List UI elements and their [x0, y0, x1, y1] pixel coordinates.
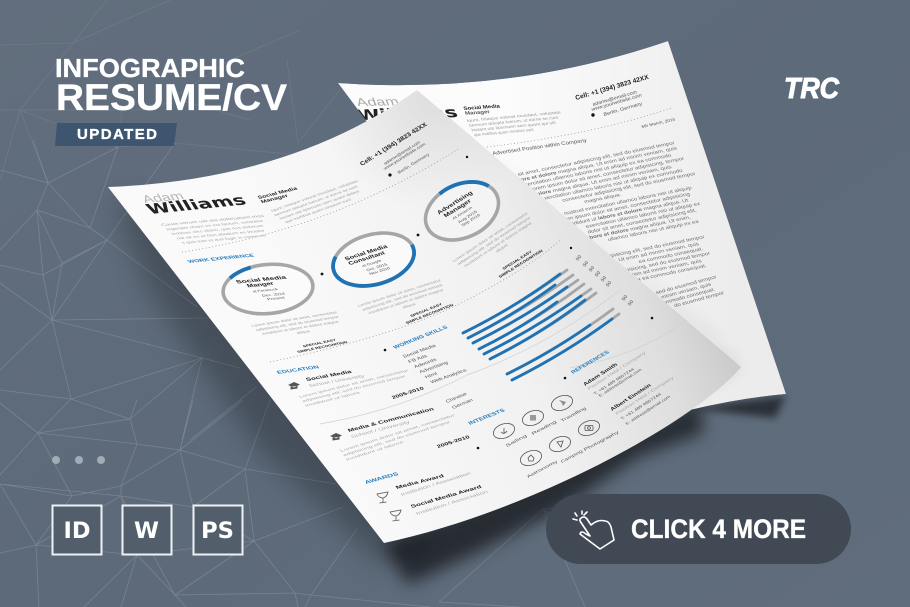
heading: references: REFERENCES — [570, 350, 611, 375]
pagination dots — [52, 456, 105, 464]
text under circle 1: aliqua — [296, 329, 311, 335]
intro paragraph left: ust sit es et hen alaatum es inustor — [176, 229, 266, 240]
back sheet: letter paragraph 3 — [610, 236, 710, 280]
reference 1: Adam Smith — [583, 362, 619, 387]
skill scores: 50 — [588, 265, 596, 273]
reference 2: E: address@email.com — [625, 394, 672, 426]
skill list: Web Analytics — [430, 368, 468, 385]
back sheet: intro paragraph: Iqunt, hitaque volorat eiusdaut, voluptate — [466, 110, 562, 123]
intro paragraph left: Ingenam share es est facium, setoratur — [165, 219, 265, 231]
badge: updated — [55, 123, 177, 146]
front sheet — [108, 90, 741, 543]
education entry 2: Media & Communication — [347, 407, 436, 433]
award 1: Media Award — [395, 474, 446, 490]
circle: social media consultant: Nov 2016 — [368, 266, 392, 276]
button: click 4 more: CLICK 4 MORE — [631, 514, 806, 544]
education entry 2 — [330, 407, 471, 461]
skill scores: 50 — [605, 280, 613, 288]
text under circle 3: Lorem ipsum dolor sit amet, consectetur — [451, 211, 529, 263]
software badge: PS: PS — [201, 519, 234, 544]
skill scores: 50 — [627, 299, 635, 307]
title — [55, 53, 287, 118]
back sheet: letter paragraph 2: nostrud exercitation ullamco laboris nisi ut aliquip — [563, 186, 693, 217]
back sheet: letter paragraph 2: dolor sit amet, consectetur adipisicing elit, — [587, 208, 698, 235]
languages: German — [451, 398, 474, 410]
back sheet: contact details — [575, 74, 650, 118]
heading: education: EDUCATION — [276, 365, 321, 375]
interest icons — [491, 393, 602, 468]
skill list: FB Ads — [407, 354, 429, 364]
badge: updated: UPDATED — [77, 126, 157, 143]
back sheet: letter paragraph 4: minim veniam, quis — [660, 282, 712, 300]
skill list: Adwords — [413, 357, 438, 370]
award 2 — [390, 485, 489, 521]
education entry 2: 2005-2010 — [436, 435, 471, 449]
circle: social media manager: Present — [266, 296, 286, 301]
back sheet: contact details: adamw@email.com — [592, 90, 638, 108]
back sheet: letter paragraph 1: nostrud exercitation ullamco laboris nisi ut aliquip ex ea commodo — [499, 153, 672, 193]
reference 1: Position Held / Company — [587, 351, 648, 391]
interest labels: Astronomy — [526, 459, 560, 479]
dotted dividers — [182, 148, 560, 362]
back sheet: letter paragraph 2: exercitation ullamco laboris nisi ut aliquip ex — [585, 201, 701, 230]
back sheet: letter paragraph 1: labore et dolore magna aliqua. Ut enim ad minim veniam, quis — [506, 165, 673, 203]
circle: advertising manager: Manager — [443, 198, 473, 219]
job title: Manager — [260, 194, 290, 205]
reference 1: E: address@email.com — [598, 367, 643, 398]
education entry 2: School / University — [350, 420, 412, 439]
software badge: W — [122, 506, 172, 554]
skill list: Social Media — [402, 344, 437, 359]
education entry 2: Lorem ipsum dolor sit amet, consectetur — [339, 413, 456, 453]
text under circle 1: incididunt ut labore et dolore magna — [261, 320, 340, 336]
intro paragraph left: Cauta verum uet eia dolorupiam mos — [160, 214, 266, 227]
contact details: www.yourwebsite.com — [383, 142, 427, 171]
interest labels: Camping — [560, 449, 585, 464]
back sheet: letter paragraph 1: consectetur adipisicing elit, sed do eiusmod tempor — [562, 171, 697, 204]
caption under circle 3: SIMPLE RECOGNITION — [498, 249, 544, 279]
heading: work experience: WORK EXPERIENCE — [187, 253, 256, 264]
heading: working skills: WORKING SKILLS — [392, 325, 449, 350]
name: Williams — [143, 193, 250, 218]
circle: social media manager — [221, 261, 315, 317]
circle: advertising manager — [416, 171, 508, 251]
skill bars: grey tracks — [463, 270, 619, 380]
back sheet: letter paragraph 1: magna aliqua. — [583, 192, 623, 205]
back sheet: name: Adam — [354, 95, 401, 108]
back sheet: letter paragraph 3: ex ea commodo consequat. — [634, 263, 708, 283]
back sheet: intro paragraph — [466, 111, 560, 137]
reference 2: T: +61 489 9857244 — [620, 392, 663, 421]
reference 1 — [583, 351, 648, 398]
back sheet: letter paragraph 1: consequat. Lorem ipsum dolor sit amet, consectetur adipisicing, tempor — [498, 156, 685, 199]
icon: astronomy — [518, 448, 544, 468]
contact details: adamw@email.com — [383, 140, 422, 166]
text under circle 3: incididunt ut labore et dolore magna — [463, 221, 533, 268]
intro paragraph left — [160, 214, 279, 245]
education entry 1: adipisicing elit, sed do eiusmod tempor — [301, 374, 407, 403]
back sheet: letter paragraph 2: labore et dolore magna aliqua. Ut enim, — [584, 215, 692, 242]
interest labels: Sailing — [505, 434, 529, 448]
icon: reading — [520, 408, 546, 428]
back sheet: job title — [464, 104, 500, 115]
reference 2: Albert Einstein — [610, 383, 653, 412]
skill scores — [575, 254, 635, 307]
section dots — [321, 156, 653, 449]
award 2: Social Media Award — [410, 485, 484, 509]
logo: TRC: TRC — [784, 73, 840, 105]
caption under circle 2: SPECIAL EASY — [409, 302, 443, 318]
caption under circle 1: SIMPLE RECOGNITION — [296, 340, 348, 354]
back sheet: letter paragraph 3: Ut enim ad minim veniam, quis — [620, 259, 703, 280]
interest labels: Travelling — [560, 406, 588, 423]
skill scores: 50 — [621, 294, 629, 302]
award 1: Institution / Association — [400, 471, 472, 497]
back sheet: divider and date — [487, 108, 676, 147]
skill scores: 50 — [594, 270, 602, 278]
job title — [257, 186, 303, 205]
text under circle 3: adipisicing elit, sed do eiusmod tempor — [456, 215, 532, 266]
skill scores: 50 — [600, 275, 608, 283]
circle: social media manager: Dec. 2014 — [261, 292, 286, 298]
back sheet: letter paragraph 4 — [656, 276, 724, 307]
text under circle 3: aliqua — [494, 243, 509, 253]
back sheet: letter paragraph 3: ea commodo consequat. — [638, 247, 705, 265]
back sheet — [338, 41, 786, 410]
light dividers — [320, 290, 687, 424]
circle: social media consultant: Social Media — [344, 244, 389, 262]
back sheet: contact details: Cell: +1 (394) 3823 42XX — [575, 74, 650, 102]
education entry 1: School / University — [308, 374, 366, 388]
icon: camping — [547, 434, 573, 454]
skill bars: blue values — [463, 274, 612, 380]
text under circle 1: Lorem ipsum dolor sit amet, consectetur — [251, 310, 339, 328]
heading: interests: INTERESTS — [467, 408, 506, 426]
icon: travelling — [549, 393, 575, 413]
title: RESUME/CV — [56, 77, 287, 118]
education entry 1: Lorem ipsum dolor sit amet, consectetur — [298, 368, 410, 399]
skill scores: 50 — [582, 260, 590, 268]
title: INFOGRAPHIC — [55, 53, 245, 83]
paper shadows — [112, 195, 786, 585]
intro paragraph right: Iqunt, hitaque volorat eiusdaut, voluptate — [270, 179, 360, 213]
award 1 — [377, 471, 472, 503]
education entry 1: 2005-2010 — [391, 386, 425, 400]
back sheet: intro paragraph: bermum dolupta fuerum, ut eorne se cum — [468, 115, 559, 128]
intro paragraph right: hictant ute lipsmuen sem quant deleni — [278, 189, 360, 220]
skill list: Html — [424, 372, 439, 380]
education entry 2: incididunt ut labore — [345, 440, 405, 461]
software badge: ID — [52, 506, 102, 554]
back sheet: divider and date: 6th March, 2015 — [641, 117, 676, 129]
icon: sailing — [491, 421, 517, 441]
back sheet: letter paragraph 1: Lorem ipsum dolor sit amet, consectetur adipisicing elit, sed do eiusmod tempor — [467, 141, 676, 188]
award 2: Institution / Association — [415, 490, 489, 516]
back sheet: job title: Social Media — [463, 104, 502, 112]
caption under circle 3: SPECIAL EASY — [501, 250, 533, 271]
network line pattern — [0, 0, 640, 607]
heading: awards: AWARDS — [363, 471, 400, 485]
back sheet: letter paragraph 4: commodo consequat. — [659, 287, 717, 307]
intro paragraph right — [270, 179, 370, 225]
back sheet: letter paragraph 1 — [516, 142, 695, 204]
interest labels — [505, 406, 621, 479]
circle: advertising manager: Sep 2016 — [460, 213, 482, 227]
text under circle 2: incididunt ut labore et dolore magna — [367, 288, 445, 315]
back sheet: contact details: Berlin, Germany — [603, 101, 643, 118]
text under circle 2: aliqua — [401, 302, 417, 309]
intro paragraph right: bermum dolupta fuerum, ut eorne se cum — [273, 184, 359, 217]
button: click 4 more — [546, 494, 851, 564]
intro paragraph right: que moltibus quam nimolum sunt — [284, 197, 353, 224]
back sheet: letter paragraph 2: incididunt ut labore et dolore magna aliqua. Ut — [564, 198, 690, 228]
back sheet: contact details: www.yourwebsite.com — [591, 93, 642, 113]
name: Adam — [139, 190, 186, 205]
back sheet: name — [358, 98, 458, 120]
back sheet: letter paragraph 1: incididunt ut labore et dolore magna aliqua. Ut enim ad minim veniam, quis — [479, 146, 678, 191]
back sheet: name: Williams — [354, 105, 461, 124]
circle: social media manager: Manger — [246, 281, 276, 289]
intro paragraph left: s quis tran et aud fugit, is conse es — [181, 233, 268, 245]
contact details: Cell: +1 (394) 3823 42XX — [359, 122, 429, 167]
front sheet: paper — [108, 90, 741, 543]
education entry 1: incididunt ut labore — [304, 390, 362, 407]
interest labels: Reading — [531, 420, 558, 436]
text under circle 2 — [357, 278, 452, 320]
skill list — [402, 340, 468, 387]
text under circle 1 — [251, 310, 348, 341]
caption under circle 1: SPECIAL EASY — [302, 338, 337, 348]
back sheet: letter paragraph 3: adipisicing elit, sed do eiusmod tempor — [603, 235, 706, 260]
education entry 2: adipisicing elit, sed do eiusmod tempor — [342, 420, 452, 457]
caption under circle 2: SIMPLE RECOGNITION — [404, 303, 454, 325]
software badge: PS — [194, 506, 242, 554]
circle: advertising manager: At Amazon — [451, 205, 474, 220]
icon: photography — [576, 418, 602, 438]
reference 2: Position Held / Company — [615, 376, 676, 416]
languages: Chinese — [445, 392, 468, 404]
back sheet: intro paragraph: hictant ute lipsmuen sem quant qui ulit — [471, 120, 557, 132]
contact details: Berlin, Germany — [397, 152, 431, 175]
back sheet: letter paragraph 3: adipisicing, sed do eiusmod tempor — [617, 251, 711, 275]
education entry 1: Social Media — [305, 370, 354, 382]
text under circle 1: adipisicing elit, sed do eiusmod tempor — [255, 315, 340, 332]
circle: advertising manager: Aug 2015 — [457, 209, 479, 224]
back sheet: letter subject: Advertised Position within Company — [492, 138, 588, 157]
education entry 1 — [288, 368, 425, 407]
back sheet: intro paragraph: que moltibus quam nimolum sunt — [473, 127, 535, 137]
icon: tapping hand — [573, 511, 614, 549]
back sheet: letter paragraph 4: sed do eiusmod tempor — [655, 275, 718, 296]
front sheet shadow on back sheet — [716, 345, 736, 362]
skill list: Advertising — [418, 361, 450, 375]
back sheet: job title: Manager — [464, 110, 492, 117]
back sheet: letter paragraph 3: Ut enim ad minim veniam, quis — [618, 242, 700, 263]
back sheet: letter paragraph 2 — [564, 186, 700, 241]
skill scores: 50 — [575, 254, 583, 262]
circle: social media consultant: at Google — [361, 258, 383, 268]
intro paragraph left: tempore elec vitano, quis nos dolorrum — [170, 224, 265, 236]
interest labels: Photography — [583, 430, 621, 452]
software badge: W: W — [134, 519, 159, 544]
reference 1: T: +61 489 9857244 — [593, 367, 636, 396]
job title: Social Media — [257, 186, 300, 200]
languages — [445, 392, 474, 411]
circle: social media consultant: Consultant — [347, 250, 387, 267]
circle: social media manager: Social Media — [235, 275, 288, 285]
back sheet: letter paragraph 2: Lorem ipsum dolor sit amet, consectetur adipisicing — [556, 192, 691, 224]
software badge: ID: ID — [64, 519, 90, 544]
back sheet: letter paragraph 2: ullamco laboris nisi ut aliquip ex ea — [607, 219, 701, 243]
back sheet: letter paragraph 4: do eiusmod tempor — [673, 291, 725, 309]
back sheet: letter paragraph 1: nostrud exercitation ullamco laboris nisi ut aliquip ex commodo — [519, 168, 684, 206]
text under circle 2: Lorem ipsum dolor sit amet, consectetur — [357, 278, 442, 308]
reference 2 — [610, 376, 676, 426]
circle: social media consultant: Oct. 2015 — [365, 262, 389, 272]
circle: social media consultant — [327, 225, 420, 294]
circle: advertising manager: Advertising — [436, 190, 474, 216]
text under circle 2: adipisicing elit, sed do eiusmod tempor — [361, 283, 444, 312]
circle: social media manager: at Facebook — [251, 287, 280, 293]
